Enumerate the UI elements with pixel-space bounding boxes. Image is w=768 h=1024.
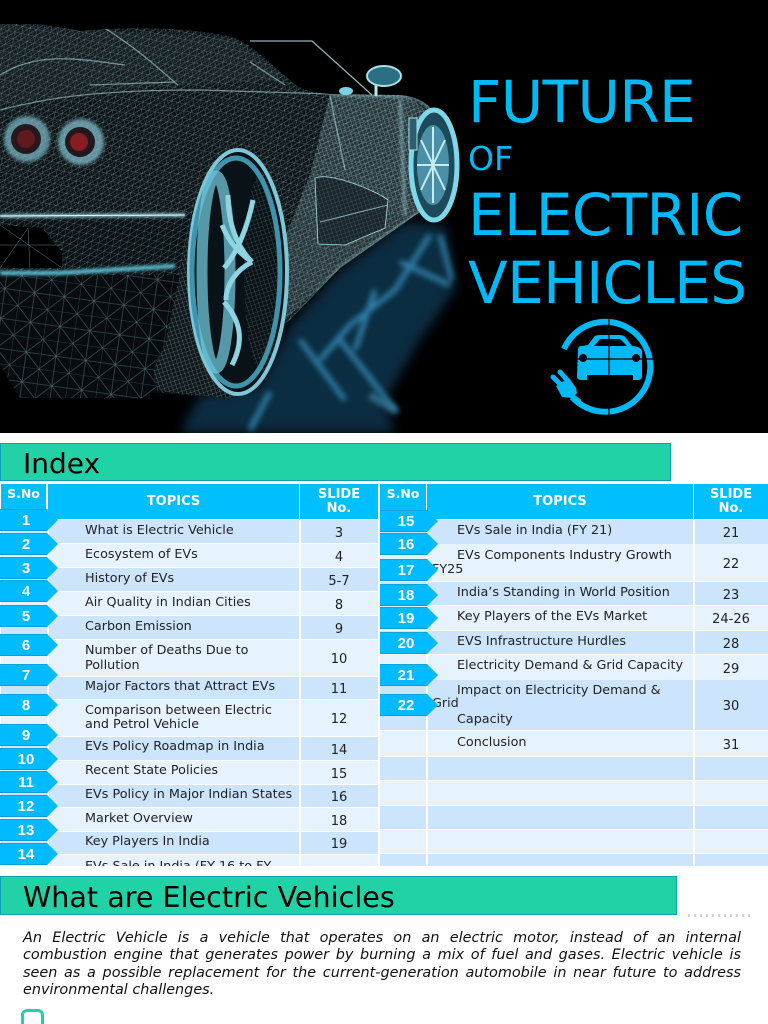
arrow labels: 15 to 22: 19	[398, 610, 414, 627]
header row	[380, 484, 768, 519]
arrow labels: 15 to 22	[380, 510, 438, 716]
arrow labels: 1 to 14: 11	[18, 774, 34, 791]
table: index left: 3	[335, 526, 343, 540]
icon: electric car plug	[550, 318, 654, 415]
table: index right: 23	[723, 588, 739, 602]
table: index right: Electricity Demand & Grid Capacity	[457, 658, 683, 673]
table: index right: 22	[723, 556, 739, 572]
table: index left: EVs Policy in Major Indian States	[85, 787, 292, 802]
table: index right: 21	[723, 526, 739, 541]
text block: definition: An Electric Vehicle is a vehicle that operates on an electric motor, instead of an internal combustion engine that generates power by burning a mix of fuel and gases. Electric vehicle is seen as a possible replacement for the current-generation automobile in near future to address environmental challenges.	[23, 930, 741, 998]
table: index left: Key Players In India	[85, 834, 210, 849]
table: index left: Market Overview	[85, 811, 193, 826]
table: index left: Number of Deaths Due to	[85, 643, 248, 658]
arrow labels: 1 to 14	[0, 509, 58, 865]
table: index right: 30	[723, 699, 739, 714]
table: index left: 10	[331, 652, 347, 667]
table: index left: Pollution	[85, 658, 140, 673]
header row	[1, 484, 378, 519]
header row: S.No	[387, 486, 419, 501]
header row: TOPICS	[147, 494, 200, 509]
table: index right: Capacity	[457, 712, 513, 727]
car body mesh	[0, 24, 430, 398]
arrow labels: 15 to 22: 22	[398, 697, 414, 714]
bumper light bars	[0, 215, 185, 273]
arrow labels: 1 to 14: 10	[18, 751, 34, 768]
table: index left: 18	[331, 814, 347, 828]
table: index right: EVs Sale in India (FY 21)	[457, 523, 612, 538]
table: index left: History of EVs	[85, 571, 174, 586]
arrow labels: 1 to 14: 6	[22, 637, 30, 654]
title: OF: OF	[468, 139, 513, 178]
table: index right: FY25	[432, 562, 463, 577]
table: index left: 16	[331, 790, 347, 805]
table: index right: India’s Standing in World Position	[457, 585, 670, 600]
title: ELECTRIC: ELECTRIC	[468, 181, 743, 249]
arrow labels: 15 to 22: 20	[398, 635, 414, 652]
table: index left: 15	[331, 766, 347, 782]
side air intake	[315, 177, 388, 245]
illustration: wireframe car	[0, 24, 460, 433]
heading: What are Electric Vehicles	[0, 876, 677, 915]
hero banner	[0, 0, 768, 433]
arrow labels: 15 to 22: 21	[398, 667, 414, 684]
table: index left: Recent State Policies	[85, 763, 218, 778]
reflection	[180, 222, 455, 433]
table: index left: Major Factors that Attract EVs	[85, 679, 275, 694]
table: index left: 12	[331, 712, 347, 727]
arrow labels: 1 to 14: 9	[22, 727, 30, 744]
table: index left: Air Quality in Indian Cities	[85, 595, 251, 610]
arrow labels: 1 to 14: 3	[22, 560, 30, 577]
arrow labels: 1 to 14: 12	[18, 798, 34, 815]
header row: No.	[719, 501, 743, 516]
tail lights	[4, 116, 104, 165]
table: index left	[1, 484, 378, 866]
table: index left: 8	[335, 598, 343, 612]
arrow labels: 1 to 14: 5	[22, 608, 30, 625]
arrow labels: 15 to 22: 17	[398, 562, 414, 579]
heading: What are Electric Vehicles: What are Electric Vehicles	[23, 880, 395, 914]
table: index left: 11	[331, 682, 347, 697]
header row: SLIDE	[318, 487, 360, 502]
table: index right	[380, 484, 768, 866]
table: index right: 24-26	[712, 612, 750, 627]
table: index right: Conclusion	[457, 735, 526, 750]
arrow labels: 15 to 22: 18	[398, 587, 414, 604]
header row: No.	[327, 501, 351, 516]
table: index left: What is Electric Vehicle	[85, 523, 234, 538]
arrow labels: 1 to 14: 13	[18, 822, 34, 839]
table: index right: Key Players of the EVs Market	[457, 609, 647, 624]
table: index right: 28	[723, 636, 739, 652]
header row: SLIDE	[710, 487, 752, 502]
heading: Index	[0, 443, 671, 481]
table: index left: Comparison between Electric	[85, 703, 272, 718]
header row: TOPICS	[533, 494, 587, 509]
table: index right: EVS Infrastructure Hurdles	[457, 634, 626, 649]
table: index left: 4	[335, 550, 343, 564]
arrow labels: 1 to 14: 2	[22, 536, 30, 553]
arrow labels: 1 to 14: 4	[22, 583, 30, 600]
table: index left: Ecosystem of EVs	[85, 547, 198, 562]
table: index left: 5-7	[328, 574, 350, 588]
table: index right: Grid	[432, 696, 459, 711]
heading: Index: Index	[23, 447, 100, 480]
table: index left: and Petrol Vehicle	[85, 717, 199, 732]
body ridges	[0, 25, 345, 170]
table: index left: 9	[335, 622, 343, 636]
table: index right: Impact on Electricity Demand &	[457, 683, 661, 698]
rear wheel	[154, 150, 288, 398]
table: index right: 31	[723, 738, 739, 752]
header row: S.No	[7, 486, 40, 501]
table: index left: 14	[331, 742, 347, 758]
table: index left: EVs Policy Roadmap in India	[85, 739, 265, 754]
grille opening	[0, 225, 62, 268]
title: VEHICLES: VEHICLES	[468, 249, 747, 317]
faint clipped text fragment	[688, 914, 750, 917]
mirror and windscreen frame	[250, 41, 401, 96]
table: index left: 19	[331, 837, 347, 852]
table: index right: EVs Components Industry Growth	[457, 548, 672, 563]
arrow labels: 1 to 14: 1	[22, 512, 30, 529]
arrow labels: 15 to 22: 16	[398, 536, 414, 553]
front wheel	[409, 110, 457, 220]
arrow labels: 15 to 22: 15	[398, 513, 414, 530]
icon: green rounded box	[21, 1009, 44, 1024]
arrow labels: 1 to 14: 14	[18, 846, 34, 863]
table: index right: 29	[723, 662, 739, 676]
table: index left: Carbon Emission	[85, 619, 192, 634]
arrow labels: 1 to 14: 7	[22, 667, 30, 684]
title: FUTURE: FUTURE	[468, 68, 695, 136]
arrow labels: 1 to 14: 8	[22, 697, 30, 714]
